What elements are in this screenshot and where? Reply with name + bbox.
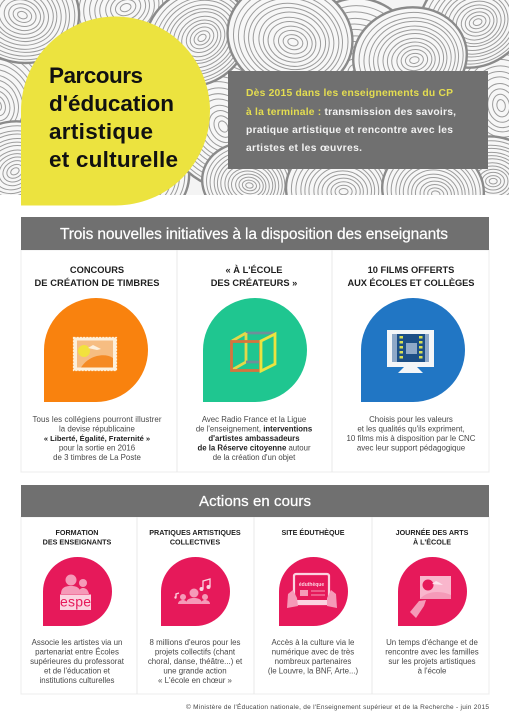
panel: à l'école des créateurs — [196, 265, 313, 462]
panel: à l'école des créateurs: DES CRÉATEURS » — [211, 278, 297, 288]
pink drop with espe icon: espe — [60, 594, 91, 610]
panel: journée des arts: JOURNÉE DES ARTS — [396, 528, 469, 537]
panel: journée des arts: Un temps d'échange et de — [386, 638, 479, 647]
pink drop with tablet icon — [279, 557, 348, 626]
section: trois nouvelles initiatives — [21, 217, 489, 472]
panel: formation: supérieures du professorat — [30, 657, 125, 666]
title: Parcours — [49, 63, 143, 88]
panel: site éduthèque: nombreux partenaires — [275, 657, 351, 666]
panel: formation: partenariat entre Écoles — [35, 648, 119, 656]
pink drop with tablet icon: éduthèque — [299, 582, 324, 588]
title — [49, 63, 178, 172]
section: actions en cours — [21, 485, 489, 694]
title drop — [21, 16, 210, 206]
panel: concours de timbres: Tous les collégiens pourront illustrer — [32, 415, 162, 424]
panel: à l'école des créateurs: de la création d'un objet — [213, 453, 296, 462]
intro box: à la terminale : transmission des savoirs, — [246, 107, 456, 118]
panel: concours de timbres: de 3 timbres de La Poste — [53, 453, 141, 462]
panel: pratiques artistiques: PRATIQUES ARTISTIQUES — [149, 528, 241, 537]
footer credit: © Ministère de l'Éducation nationale, de l'Enseignement supérieur et de la Recherche - juin 2015 — [186, 702, 489, 711]
section heading — [21, 217, 489, 250]
panel: 10 films: avec leur support pédagogique — [357, 444, 466, 452]
panel: journée des arts: À L'ÉCOLE — [413, 538, 451, 546]
panel: formation: DES ENSEIGNANTS — [43, 538, 112, 546]
intro box: artistes et les œuvres. — [246, 143, 362, 154]
title: d'éducation — [49, 91, 174, 116]
panel: à l'école des créateurs: de l'enseignement, interventions — [196, 424, 313, 434]
panel: pratiques artistiques — [148, 528, 243, 685]
panel: pratiques artistiques: « L'école en chœur » — [158, 676, 233, 685]
panel: 10 films: Choisis pour les valeurs — [369, 415, 453, 424]
pink drop with espe icon — [43, 557, 112, 626]
intro box: Dès 2015 dans les enseignements du CP — [246, 88, 453, 99]
panel: 10 films: AUX ÉCOLES ET COLLÈGES — [348, 278, 474, 288]
section heading: Actions en cours — [199, 493, 311, 510]
panel: formation — [30, 528, 125, 685]
panel: site éduthèque: Accès à la culture via le — [272, 638, 355, 647]
panel: journée des arts — [385, 528, 479, 676]
panel: concours de timbres: DE CRÉATION DE TIMBRES — [34, 278, 160, 288]
panel: pratiques artistiques: une grande action — [163, 666, 227, 676]
panel: 10 films: 10 films mis à disposition par le CNC — [347, 434, 476, 443]
panel: pratiques artistiques: 8 millions d'euros pour les — [150, 638, 241, 647]
intro box: pratique artistique et rencontre avec les — [246, 125, 453, 136]
intro box — [228, 71, 488, 169]
panel: journée des arts: rencontre avec les familles — [385, 648, 479, 656]
panel: site éduthèque — [268, 528, 359, 676]
panel: concours de timbres: la devise républicaine — [59, 424, 136, 434]
panel: à l'école des créateurs: « À L'ÉCOLE — [226, 265, 282, 275]
panel: 10 films — [347, 265, 476, 452]
green drop with cube icon — [203, 298, 307, 402]
panel: pratiques artistiques: choral, danse, théâtre...) et — [148, 657, 243, 666]
panel: formation: Associe les artistes via un — [32, 638, 122, 647]
panel: journée des arts: sur les projets artistiques — [388, 657, 476, 666]
section heading — [21, 485, 489, 517]
panel: concours de timbres: pour la sortie en 2016 — [59, 444, 136, 452]
panel: formation: FORMATION — [56, 528, 98, 537]
section heading: Trois nouvelles initiatives à la disposition des enseignants — [60, 226, 448, 243]
panel: site éduthèque: numérique avec de très — [272, 648, 354, 656]
panel: concours de timbres — [32, 265, 162, 462]
panel: formation: institutions culturelles — [40, 676, 115, 685]
panel: à l'école des créateurs: Avec Radio France et la Ligue — [202, 415, 306, 424]
title: et culturelle — [49, 147, 178, 172]
panel: formation: et de l'éducation et — [44, 666, 111, 676]
title: artistique — [49, 119, 153, 144]
panel: 10 films: 10 FILMS OFFERTS — [368, 265, 454, 275]
panel: concours de timbres: CONCOURS — [70, 265, 124, 275]
panel: pratiques artistiques: projets collectifs (chant — [155, 648, 236, 656]
panel: site éduthèque: SITE ÉDUTHÈQUE — [281, 528, 345, 537]
pink drop with choir icon — [161, 557, 230, 626]
panel: pratiques artistiques: COLLECTIVES — [170, 538, 220, 546]
panel: journée des arts: à l'école — [418, 666, 447, 676]
orange drop with stamp icon — [44, 298, 148, 402]
panel: site éduthèque: (le Louvre, la BNF, Arte...) — [268, 666, 359, 676]
panel: à l'école des créateurs: d'artistes ambassadeurs — [208, 434, 300, 443]
panel: concours de timbres: « Liberté, Égalité, Fraternité » — [44, 434, 150, 443]
background: swirling line pattern — [0, 0, 509, 195]
blue drop with film screen icon — [361, 298, 465, 402]
panel: à l'école des créateurs: de la Réserve citoyenne autour — [197, 444, 311, 452]
panel: 10 films: et les qualités qu'ils expriment, — [357, 424, 465, 434]
pink drop with picture in hand icon — [398, 557, 467, 626]
